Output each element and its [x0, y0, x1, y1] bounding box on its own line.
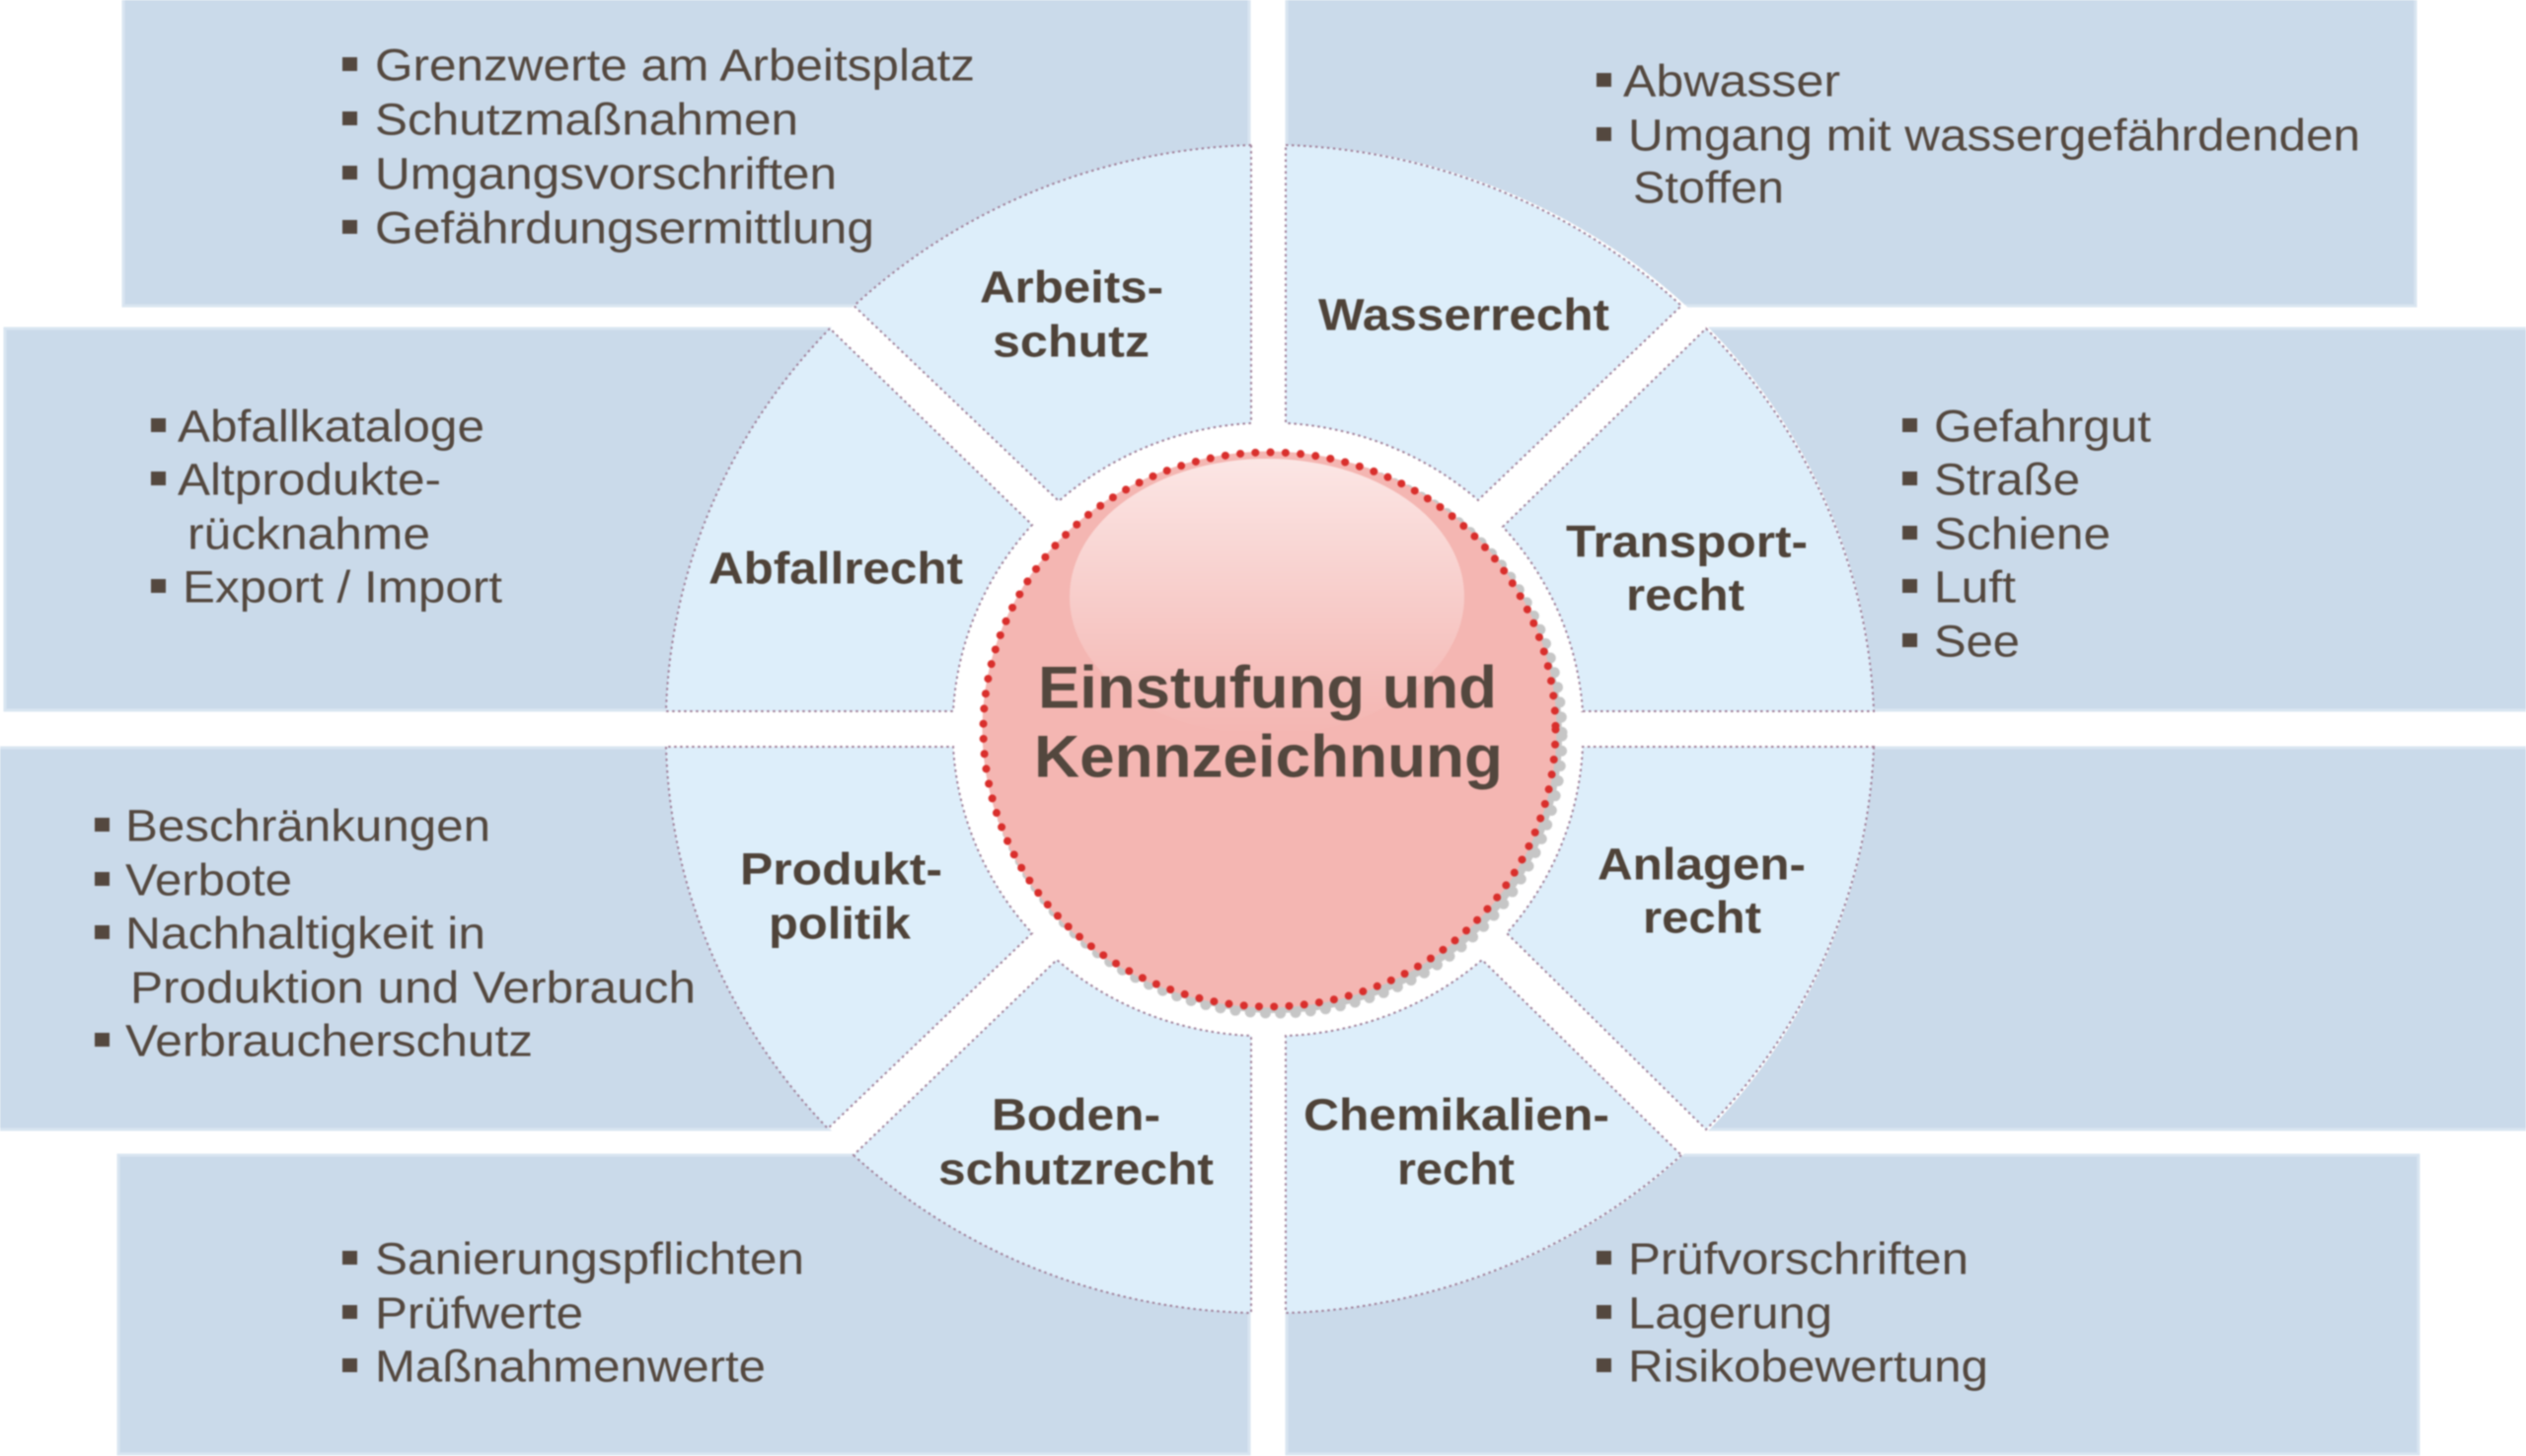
- list: Bodenschutzrecht items: Maßnahmenwerte: [375, 1342, 766, 1391]
- panel: Chemikalienrecht details: [1287, 1155, 2418, 1454]
- list: Wasserrecht items: Abwasser: [1623, 55, 1840, 107]
- list: Wasserrecht items: Stoffen: [1633, 162, 1784, 213]
- panel: Anlagenrecht details (empty): [1381, 748, 2526, 1129]
- list: Arbeitsschutz items: Umgangsvorschriften: [375, 148, 837, 199]
- segment: Produktpolitik: [666, 747, 1032, 1128]
- center circle: [983, 452, 1562, 1013]
- list: Chemikalienrecht items: [1597, 1233, 1988, 1391]
- center title: Einstufung und: [1038, 655, 1497, 720]
- list: Transportrecht items: Gefahrgut: [1934, 400, 2152, 452]
- segment: Bodenschutzrecht: [854, 960, 1251, 1313]
- list: Abfallrecht items: [151, 400, 503, 612]
- segment: Transportrecht: recht: [1626, 570, 1745, 619]
- segment: Anlagenrecht: [1507, 747, 1874, 1129]
- segment: Chemikalienrecht: Chemikalien-: [1303, 1089, 1609, 1140]
- list: Arbeitsschutz items: Grenzwerte am Arbeitsplatz: [375, 39, 975, 91]
- list: Abfallrecht items: rücknahme: [187, 509, 430, 558]
- panel: Wasserrecht details: [1287, 0, 2415, 306]
- list: Chemikalienrecht items: Prüfvorschriften: [1628, 1233, 1969, 1284]
- segment: Arbeitsschutz: Arbeits-: [980, 262, 1163, 312]
- panel: Abfallrecht details: [5, 328, 1189, 710]
- list: Produktpolitik items: Produktion und Verbrauch: [130, 963, 696, 1012]
- segment: Bodenschutzrecht: schutzrecht: [938, 1144, 1214, 1194]
- segment: Transportrecht: [1503, 328, 1874, 711]
- segment: Arbeitsschutz: schutz: [993, 316, 1150, 367]
- center title: [1034, 655, 1503, 789]
- list: Abfallrecht items: Export / Import: [183, 562, 503, 612]
- list: Transportrecht items: Schiene: [1934, 509, 2111, 558]
- list: Transportrecht items: [1902, 400, 2152, 667]
- segment: Anlagenrecht: Anlagen-: [1597, 838, 1806, 890]
- segment: Chemikalienrecht: recht: [1397, 1144, 1515, 1194]
- panel: Bodenschutzrecht details: [118, 1155, 1249, 1454]
- list: Produktpolitik items: Verbraucherschutz: [125, 1016, 533, 1065]
- list: Abfallrecht items: Abfallkataloge: [178, 400, 484, 452]
- list: Produktpolitik items: [95, 801, 696, 1065]
- list: Transportrecht items: Straße: [1934, 454, 2080, 505]
- list: Transportrecht items: See: [1934, 616, 2020, 667]
- list: Wasserrecht items: Umgang mit wassergefährdenden: [1628, 110, 2360, 160]
- list: Produktpolitik items: Verbote: [125, 854, 292, 906]
- center title: Kennzeichnung: [1034, 724, 1503, 789]
- segment: Anlagenrecht: recht: [1643, 892, 1761, 943]
- list: Bodenschutzrecht items: Sanierungspflichten: [375, 1233, 804, 1284]
- panel: Transportrecht details: [1381, 328, 2526, 710]
- segment: Wasserrecht: Wasserrecht: [1318, 290, 1609, 339]
- segment: Abfallrecht: Abfallrecht: [708, 543, 963, 594]
- list: Arbeitsschutz items: [342, 39, 975, 253]
- segment: Chemikalienrecht: [1286, 960, 1681, 1313]
- list: Produktpolitik items: Nachhaltigkeit in: [125, 908, 485, 959]
- segment: Transportrecht: Transport-: [1566, 517, 1808, 566]
- list: Bodenschutzrecht items: [342, 1233, 804, 1391]
- segment: Produktpolitik: politik: [769, 898, 912, 949]
- segment: Bodenschutzrecht: Boden-: [992, 1089, 1160, 1140]
- list: Transportrecht items: Luft: [1934, 562, 2017, 612]
- segment: Abfallrecht: [666, 328, 1032, 711]
- wheel backing disc: [666, 145, 1874, 1313]
- panel: Produktpolitik details: [0, 748, 1180, 1129]
- list: Arbeitsschutz items: Schutzmaßnahmen: [375, 95, 798, 144]
- list: Bodenschutzrecht items: Prüfwerte: [375, 1288, 583, 1338]
- segment: Arbeitsschutz: [854, 145, 1251, 501]
- list: Produktpolitik items: Beschränkungen: [125, 801, 490, 850]
- list: Arbeitsschutz items: Gefährdungsermittlung: [375, 203, 874, 253]
- list: Abfallrecht items: Altprodukte-: [178, 454, 441, 505]
- list: Chemikalienrecht items: Lagerung: [1628, 1288, 1832, 1338]
- panel: Arbeitsschutz details: [123, 0, 1249, 306]
- list: Wasserrecht items: [1597, 55, 2360, 213]
- segment: Produktpolitik: Produkt-: [740, 844, 942, 894]
- list: Chemikalienrecht items: Risikobewertung: [1628, 1342, 1988, 1391]
- segment: Wasserrecht: [1286, 145, 1681, 500]
